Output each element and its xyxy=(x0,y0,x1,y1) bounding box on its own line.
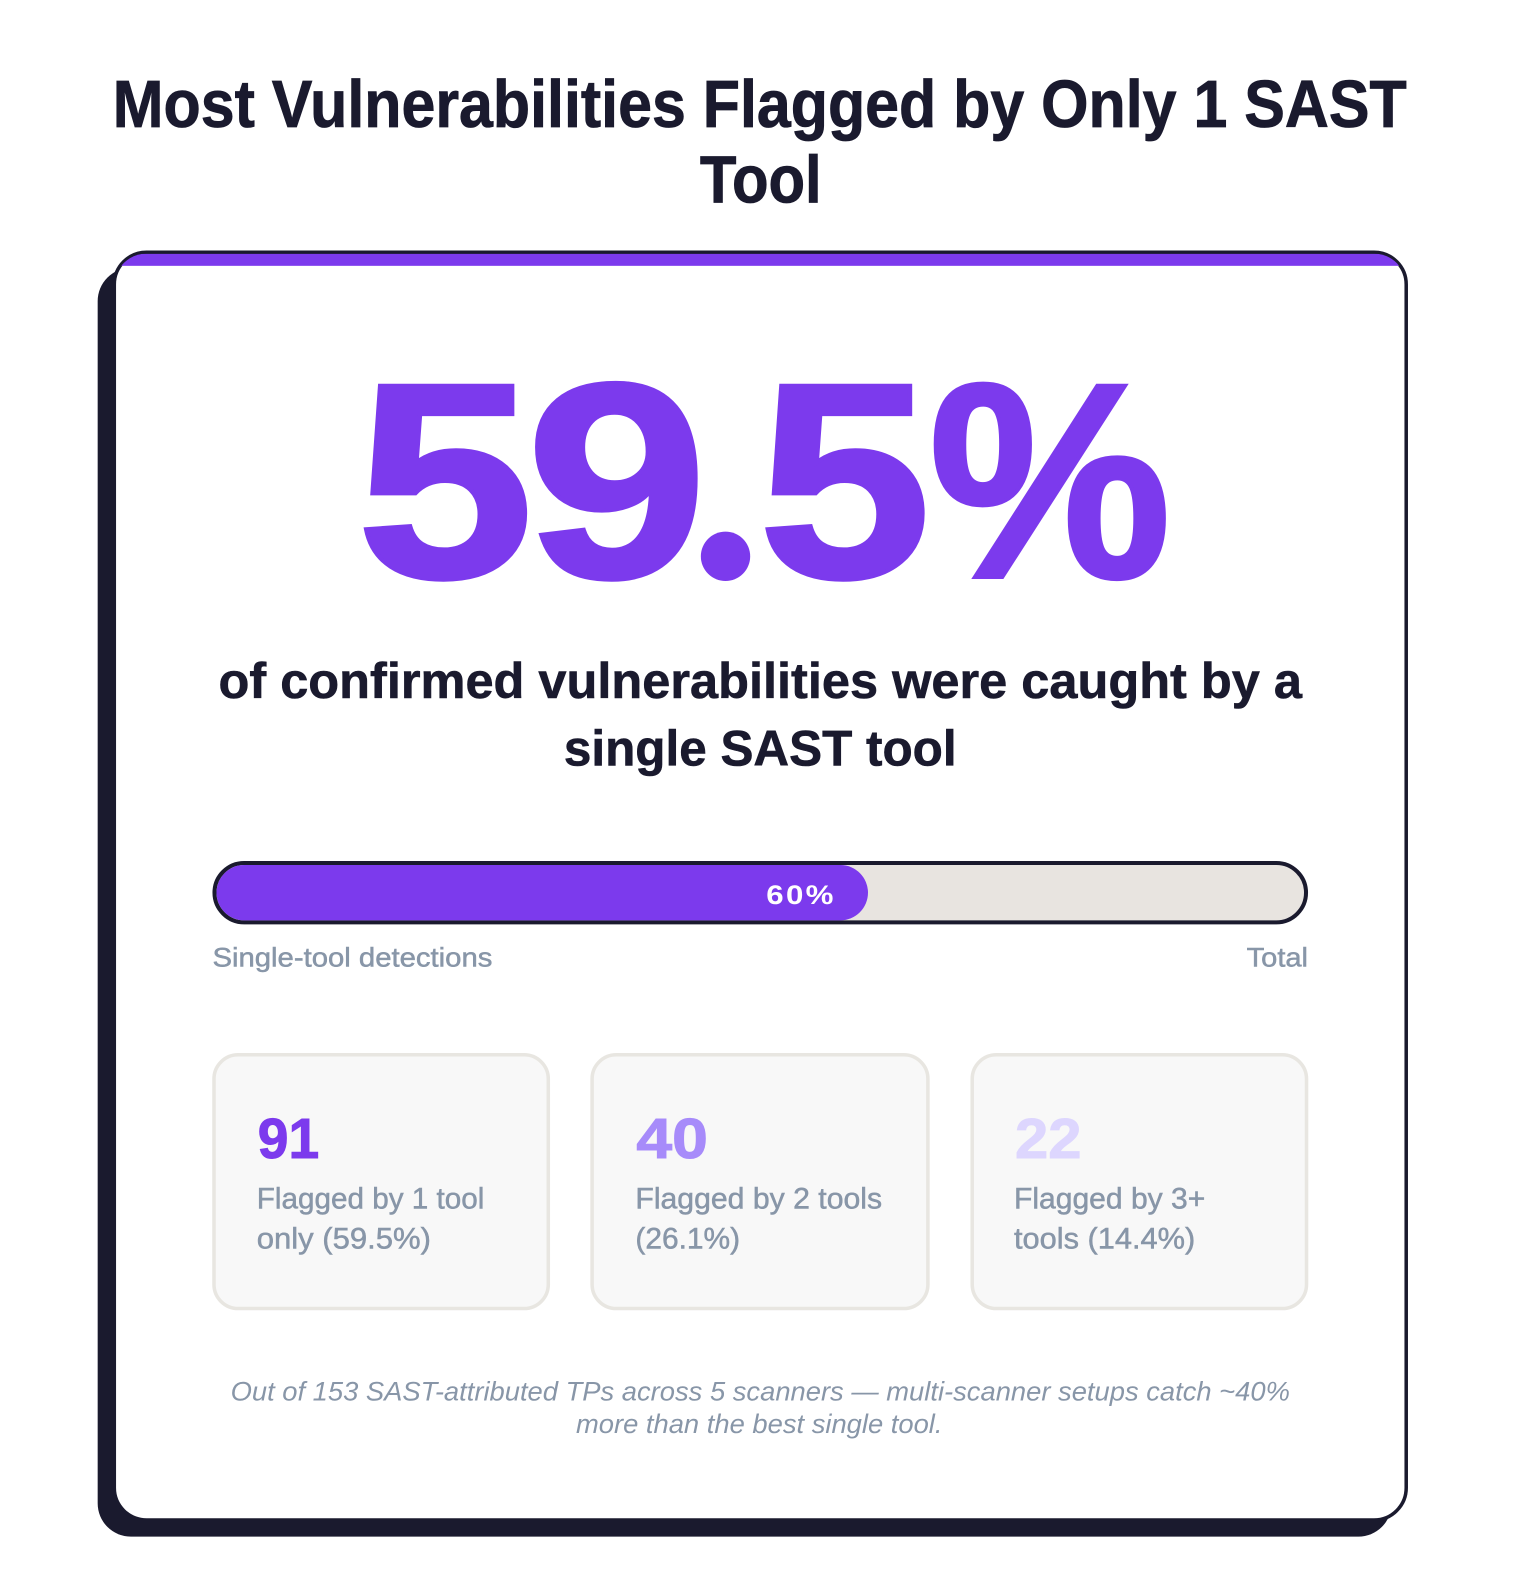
bar label: right: Total xyxy=(1247,942,1308,973)
footnote xyxy=(231,1376,1290,1439)
bar track xyxy=(214,863,1306,922)
title: Tool xyxy=(700,143,822,217)
stat card: 40: 40 xyxy=(636,1107,708,1170)
stat card: 91: Flagged by 1 tool xyxy=(257,1182,484,1215)
subtitle: single SAST tool xyxy=(564,719,957,776)
card top accent xyxy=(115,254,1406,266)
big statistic: 9 xyxy=(526,325,707,636)
footnote: Out of 153 SAST-attributed TPs across 5 scanners — multi-scanner setups catch ~40% xyxy=(231,1376,1290,1407)
stat card: 22: 22 xyxy=(1015,1107,1081,1170)
big statistic: . xyxy=(707,446,744,593)
bar fill xyxy=(216,865,868,920)
stat card: 22: tools (14.4%) xyxy=(1014,1223,1195,1256)
subtitle xyxy=(219,652,1303,776)
stat card: 40: (26.1%) xyxy=(635,1223,740,1256)
footnote: more than the best single tool. xyxy=(576,1408,943,1439)
stat card: 40 xyxy=(592,1055,928,1309)
stat card: 40: Flagged by 2 tools xyxy=(635,1182,882,1215)
big statistic: 5 xyxy=(356,325,534,636)
card body xyxy=(114,252,1406,1520)
stat card: 22: Flagged by 3+ xyxy=(1014,1182,1205,1215)
big statistic xyxy=(356,325,1171,636)
stat card: 91 xyxy=(214,1055,548,1309)
bar value: 60% xyxy=(766,879,836,910)
bar label: left: Single-tool detections xyxy=(212,942,492,973)
stat card: 22 xyxy=(972,1055,1307,1309)
subtitle: of confirmed vulnerabilities were caught by a xyxy=(219,652,1303,709)
stat card: 91: only (59.5%) xyxy=(257,1223,431,1256)
big statistic: 5 xyxy=(758,325,931,636)
card hard shadow xyxy=(98,268,1392,1537)
title: Most Vulnerabilities Flagged by Only 1 SAST xyxy=(113,68,1407,142)
big statistic: % xyxy=(929,325,1171,636)
progress bar xyxy=(214,863,1306,922)
title xyxy=(113,68,1407,217)
stat card: 91: 91 xyxy=(258,1107,319,1170)
panel: main card xyxy=(98,252,1406,1537)
